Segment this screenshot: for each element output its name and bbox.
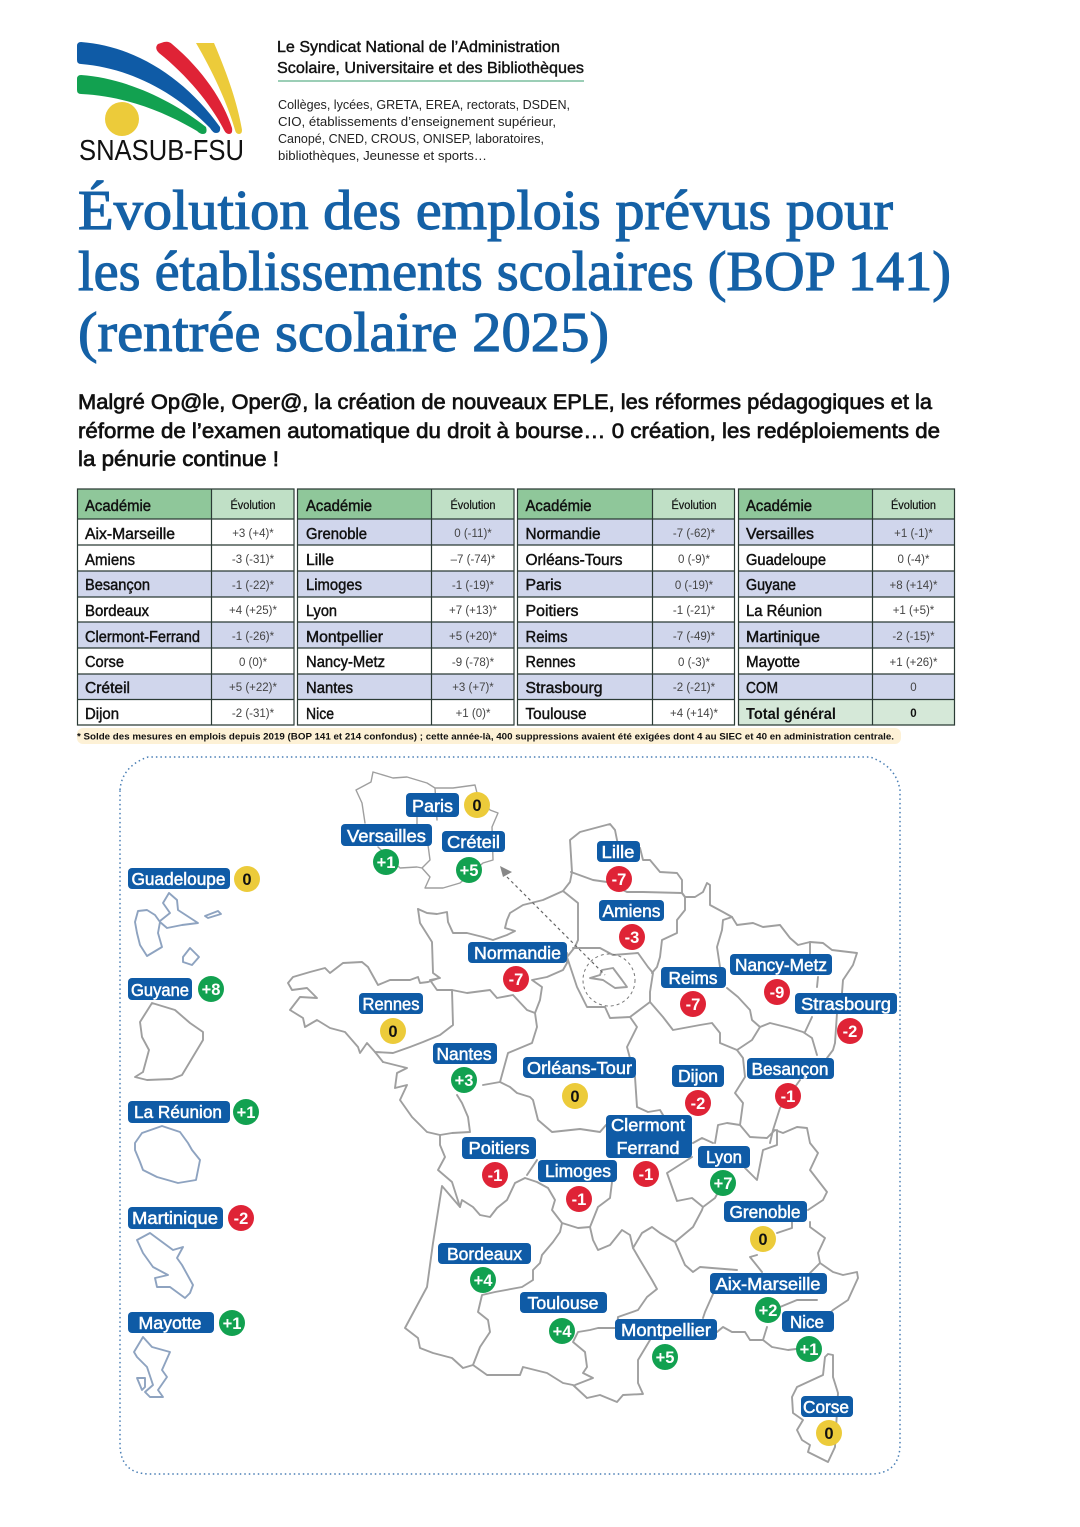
marker: Nice: +1: [800, 1341, 818, 1359]
introduction text: réforme de l’examen automatique du droit à bourse… 0 création, les redéploiements de: [78, 419, 940, 443]
table 3: Académie: [526, 498, 592, 515]
marker: Limoges: Limoges: [545, 1161, 611, 1181]
marker: Martinique: -2: [234, 1210, 248, 1228]
table 1: 0 (0)*: [239, 657, 268, 669]
organisation scope text: [278, 98, 570, 163]
marker: La Réunion: [128, 1099, 259, 1125]
organisation name: Le Syndicat National de l’Administration: [277, 39, 560, 56]
table 4: Mayotte: [746, 654, 800, 671]
marker: Strasbourg: -2: [843, 1023, 857, 1041]
marker: Limoges: -1: [572, 1191, 586, 1209]
table 2: +7 (+13)*: [449, 605, 497, 617]
marker: La Réunion: +1: [237, 1104, 255, 1122]
table 3: Strasbourg: [526, 680, 602, 697]
marker: Grenoble: Grenoble: [730, 1202, 800, 1222]
inset: Île-de-France: [356, 772, 498, 888]
marker: Guadeloupe: 0: [242, 871, 252, 889]
marker: Créteil: +5: [460, 862, 478, 880]
marker: Dijon: Dijon: [678, 1066, 718, 1086]
table 3: Rennes: [526, 654, 576, 671]
marker: Amiens: -3: [625, 929, 639, 947]
table 2: +1 (0)*: [456, 708, 491, 720]
marker: Normandie: [468, 942, 567, 992]
table 1: -3 (-31)*: [232, 554, 275, 566]
marker: Paris: Paris: [412, 796, 453, 816]
organisation scope text: bibliothèques, Jeunesse et sports…: [278, 149, 487, 163]
table 3: Poitiers: [526, 603, 579, 620]
marker: Clermont-Ferrand: Clermont: [611, 1115, 685, 1135]
marker: Grenoble: [724, 1201, 807, 1252]
overseas: Mayotte outline: [134, 1337, 170, 1397]
table 3: +4 (+14)*: [670, 708, 718, 720]
table 2: 0 (-11)*: [454, 528, 492, 540]
marker: Nantes: [433, 1043, 497, 1093]
marker: Reims: Reims: [668, 968, 718, 988]
marker: Mayotte: Mayotte: [138, 1313, 202, 1333]
table 4: Versailles: [746, 526, 814, 543]
title: [78, 180, 951, 364]
marker: Créteil: Créteil: [447, 832, 500, 852]
table 4: COM: [746, 680, 778, 697]
table 1: Aix-Marseille: [85, 526, 175, 543]
table 2: Nancy-Metz: [306, 654, 385, 671]
table 4: +1 (+26)*: [890, 657, 938, 669]
marker: Toulouse: +4: [553, 1323, 572, 1341]
table 2: –7 (-74)*: [451, 554, 496, 566]
table 4: Évolution: [891, 499, 936, 512]
title: Évolution des emplois prévus pour: [78, 180, 893, 242]
marker: Versailles: Versailles: [347, 826, 426, 846]
table 4: 0 (-4)*: [898, 554, 930, 566]
table 3: Normandie: [526, 526, 600, 543]
table 2: [298, 489, 514, 725]
table 1: Créteil: [85, 680, 130, 697]
marker: Reims: -7: [686, 996, 700, 1014]
marker: Poitiers: -1: [488, 1167, 502, 1185]
marker: Martinique: Martinique: [132, 1208, 218, 1228]
marker: Orléans-Tours: [523, 1057, 636, 1109]
marker: Versailles: +1: [377, 854, 395, 872]
table 1: Bordeaux: [85, 603, 149, 620]
table 1: Clermont-Ferrand: [85, 629, 200, 646]
marker: Mayotte: [128, 1310, 245, 1336]
table 3: Évolution: [672, 499, 716, 512]
marker: Bordeaux: +4: [474, 1272, 493, 1290]
table 3: -7 (-62)*: [673, 528, 716, 540]
table 2: Évolution: [450, 499, 496, 512]
table 2: Lyon: [306, 603, 337, 620]
marker: Mayotte: +1: [223, 1315, 241, 1333]
table 4: La Réunion: [746, 603, 822, 620]
marker: Clermont-Ferrand: Ferrand: [616, 1138, 680, 1158]
table 2: Nice: [306, 706, 334, 723]
marker: Clermont-Ferrand: [606, 1115, 692, 1187]
marker: Lille: -7: [612, 871, 626, 889]
marker: Guyane: +8: [202, 981, 220, 999]
table 2: +5 (+20)*: [449, 631, 497, 643]
table 4: Guyane: [746, 577, 796, 594]
marker: Orléans-Tours: 0: [570, 1088, 580, 1106]
marker: Dijon: [672, 1065, 724, 1116]
marker: Paris: 0: [472, 797, 482, 815]
marker: Rennes: Rennes: [362, 994, 420, 1014]
table 3: Reims: [526, 629, 568, 646]
marker: Guadeloupe: [128, 866, 260, 892]
table 4: Académie: [746, 498, 812, 515]
marker: Besançon: -1: [781, 1088, 795, 1106]
marker: Aix-Marseille: +2: [759, 1302, 777, 1320]
marker: Paris: [406, 792, 490, 818]
marker: Lyon: Lyon: [706, 1147, 742, 1167]
table 4: +8 (+14)*: [890, 580, 938, 592]
table 1: Amiens: [85, 552, 135, 569]
introduction text: la pénurie continue !: [78, 447, 279, 471]
marker: Rennes: [359, 993, 423, 1044]
table 1: Évolution: [230, 499, 276, 512]
table 4: Total général: [746, 706, 836, 723]
table 4: +1 (+5)*: [893, 605, 935, 617]
marker: Rennes: 0: [388, 1023, 398, 1041]
table 1: +5 (+22)*: [229, 682, 277, 694]
marker: Strasbourg: [795, 993, 897, 1044]
table 1: Académie: [85, 498, 151, 515]
marker: Martinique: [128, 1205, 254, 1231]
table 2: Nantes: [306, 680, 353, 697]
marker: Guadeloupe: Guadeloupe: [132, 869, 226, 889]
table 2: Montpellier: [306, 629, 383, 646]
organisation scope text: Canopé, CNED, CROUS, ONISEP, laboratoires,: [278, 132, 544, 146]
marker: Besançon: Besançon: [752, 1059, 828, 1079]
marker: Poitiers: Poitiers: [468, 1138, 530, 1158]
marker: Toulouse: [520, 1292, 607, 1344]
table 4: 0: [910, 708, 917, 720]
marker: Nantes: +3: [455, 1072, 473, 1090]
map: France academies: [288, 824, 858, 1462]
table 1: -1 (-22)*: [232, 580, 275, 592]
overseas: Martinique outline: [137, 1233, 193, 1298]
marker: Normandie: Normandie: [474, 943, 561, 963]
table 3: 0 (-3)*: [678, 657, 710, 669]
marker: Nancy-Metz: [730, 954, 832, 1005]
table 3: Orléans-Tours: [526, 552, 623, 569]
organisation scope text: Collèges, lycées, GRETA, EREA, rectorats, DSDEN,: [278, 98, 570, 112]
table 4: -2 (-15)*: [892, 631, 935, 643]
title: les établissements scolaires (BOP 141): [78, 241, 951, 303]
marker: Nice: [782, 1311, 834, 1362]
logo: SNASUB-FSU: SNASUB-FSU: [79, 135, 244, 167]
marker: Nice: Nice: [790, 1312, 824, 1332]
logo: SNASUB-FSU: [77, 42, 244, 167]
marker: Guyane: Guyane: [131, 980, 189, 1000]
marker: Besançon: [747, 1058, 834, 1109]
marker: Normandie: -7: [509, 971, 523, 989]
table 1: Dijon: [85, 706, 119, 723]
table 4: Martinique: [746, 629, 820, 646]
table 3: -1 (-21)*: [673, 605, 716, 617]
table 3: Toulouse: [526, 706, 586, 723]
arrow: Île-de-France zoom: [500, 866, 605, 975]
marker: Corse: [801, 1396, 853, 1446]
marker: Lille: Lille: [602, 842, 634, 862]
table 1: Corse: [85, 654, 124, 671]
marker: Montpellier: Montpellier: [621, 1320, 711, 1340]
table 1: -2 (-31)*: [232, 708, 275, 720]
marker: Nancy-Metz: Nancy-Metz: [735, 955, 827, 975]
table 1: -1 (-26)*: [232, 631, 275, 643]
organisation name: Scolaire, Universitaire et des Bibliothèques: [277, 60, 584, 77]
marker: La Réunion: La Réunion: [134, 1102, 222, 1122]
table 1: [78, 489, 294, 725]
marker: Lille: [597, 841, 640, 892]
overseas: La Réunion outline: [135, 1126, 200, 1183]
marker: Toulouse: Toulouse: [528, 1293, 598, 1313]
marker: Limoges: [538, 1160, 617, 1212]
table 3: [518, 489, 734, 725]
table 1: +4 (+25)*: [229, 605, 277, 617]
table 3: 0 (-9)*: [678, 554, 710, 566]
marker: Amiens: Amiens: [602, 901, 661, 921]
table 4: Guadeloupe: [746, 552, 826, 569]
table 3: Paris: [526, 577, 562, 594]
marker: Montpellier: [615, 1319, 717, 1370]
marker: Dijon: -2: [691, 1095, 705, 1113]
table 2: +3 (+7)*: [452, 682, 494, 694]
table 2: -1 (-19)*: [452, 580, 495, 592]
table 2: Limoges: [306, 577, 362, 594]
table 3: 0 (-19)*: [675, 580, 714, 592]
marker: Nancy-Metz: -9: [770, 984, 784, 1002]
organisation name: [277, 39, 584, 81]
table 4: [738, 489, 954, 725]
marker: Lyon: [698, 1146, 750, 1196]
table 2: Académie: [306, 498, 372, 515]
footnote: * Solde des mesures en emplois depuis 2019 (BOP 141 et 214 confondus) ; cette année-là, 400 suppressions avaient été exigées dont 4 au SIEC et 40 en administration centrale.: [77, 732, 894, 742]
marker: Créteil: [442, 831, 505, 883]
marker: Reims: [661, 967, 726, 1017]
marker: Grenoble: 0: [758, 1231, 768, 1249]
introduction text: Malgré Op@le, Oper@, la création de nouveaux EPLE, les réformes pédagogiques et la: [78, 390, 932, 414]
marker: Versailles: [341, 824, 432, 875]
marker: Guyane: [128, 976, 224, 1002]
introduction text: [78, 390, 940, 471]
table 2: Grenoble: [306, 526, 367, 543]
marker: Poitiers: [462, 1137, 536, 1188]
marker: Corse: 0: [824, 1425, 834, 1443]
table 1: +3 (+4)*: [232, 528, 274, 540]
marker: Amiens: [599, 900, 664, 950]
table 1: Besançon: [85, 577, 150, 594]
overseas: Guyane outline: [135, 1003, 203, 1080]
table 4: 0: [910, 682, 917, 694]
marker: Nantes: Nantes: [436, 1044, 492, 1064]
overseas: Guadeloupe outline: [135, 893, 221, 965]
marker: Corse: Corse: [803, 1397, 849, 1417]
footnote: [77, 728, 901, 744]
marker: Orléans-Tours: Orléans-Tour: [527, 1058, 632, 1078]
marker: Aix-Marseille: Aix-Marseille: [716, 1274, 820, 1294]
marker: Aix-Marseille: [710, 1273, 827, 1323]
marker: Bordeaux: Bordeaux: [447, 1244, 522, 1264]
marker: Bordeaux: [438, 1243, 531, 1293]
table 2: Lille: [306, 552, 334, 569]
title: (rentrée scolaire 2025): [78, 302, 609, 364]
table 4: +1 (-1)*: [894, 528, 933, 540]
marker: Lyon: +7: [714, 1175, 732, 1193]
marker: Clermont-Ferrand: -1: [639, 1166, 653, 1184]
marker: Montpellier: +5: [656, 1349, 674, 1367]
table 3: -7 (-49)*: [673, 631, 716, 643]
table 2: -9 (-78)*: [452, 657, 495, 669]
organisation scope text: CIO, établissements d’enseignement supérieur,: [278, 115, 556, 129]
map frame: [120, 757, 900, 1474]
marker: Strasbourg: Strasbourg: [801, 994, 891, 1014]
table 3: -2 (-21)*: [673, 682, 716, 694]
